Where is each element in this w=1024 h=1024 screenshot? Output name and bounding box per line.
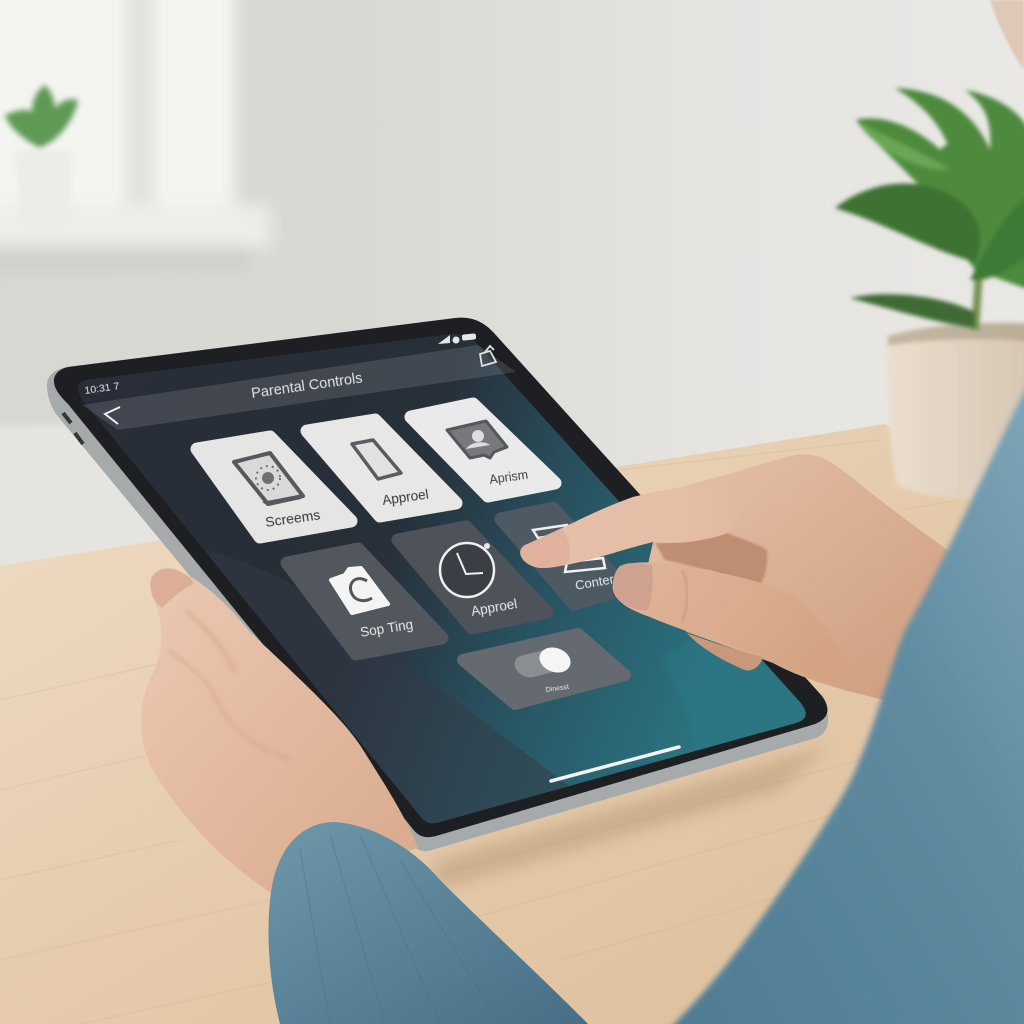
toggle switch [515,643,574,677]
status time: 10:31 7 [84,380,120,397]
tile: Sop Ting [287,549,442,654]
tablet silver frame [47,319,828,851]
tile: Approval clock [398,527,547,628]
icon: phone with dots [234,453,303,506]
thumbnail [614,563,653,611]
blurred window with sill [0,0,270,269]
label Screens: Screems [264,506,321,530]
left thumbnail [151,569,194,608]
thumb [613,562,860,690]
icon: content window [533,525,605,572]
person's shoulder top right [990,0,1024,70]
tablet black bezel [54,318,827,837]
left sleeve [268,822,588,1024]
ring finger [687,633,763,670]
right hand [520,454,950,700]
blurred potted plant [835,88,1024,500]
screen title: Parental Controls [250,371,363,402]
toggle card [463,634,625,704]
back chevron [105,407,120,424]
tablet side buttons [63,413,83,444]
toggle label: Dinesst [545,684,569,694]
fingertip blush [520,528,570,568]
tile: Screens [197,437,351,537]
home indicator [551,747,679,781]
blurred small plant on the sill [5,85,78,225]
white sofa or bench edge at left [0,425,185,575]
label Approval: Approel [381,487,430,508]
label Sop Ting: Sop Ting [359,617,414,640]
plant pot [886,322,1024,500]
tile: Apptem [411,404,555,496]
label Apptem: Aprism [488,468,529,487]
palm crease [168,650,290,760]
icon: clock [440,543,494,597]
wooden table [0,424,1024,1024]
curled finger shadow [655,533,767,585]
thumb knuckle shading [185,610,235,672]
icon: phone [352,440,401,479]
screen soft sheens [416,701,804,823]
status icons [438,333,476,344]
index finger [520,480,750,568]
tablet screen [78,334,806,823]
left hand [141,568,418,892]
share icon [480,346,496,366]
back of hand and palm [633,454,950,700]
label Approval: Approel [470,596,518,619]
hand and thumb [141,568,418,892]
shadow under tablet [430,745,830,890]
header bar [82,345,516,430]
plant leaves [835,88,1024,330]
label Content: Conter [574,571,616,593]
icon: camera badge [331,568,388,613]
tablet [47,318,828,851]
icon: profile chat bubble [447,421,507,458]
knuckle crease [682,570,687,622]
tile: Content [501,508,626,604]
tile: Approval [307,420,456,516]
right sleeve [668,380,1024,1024]
